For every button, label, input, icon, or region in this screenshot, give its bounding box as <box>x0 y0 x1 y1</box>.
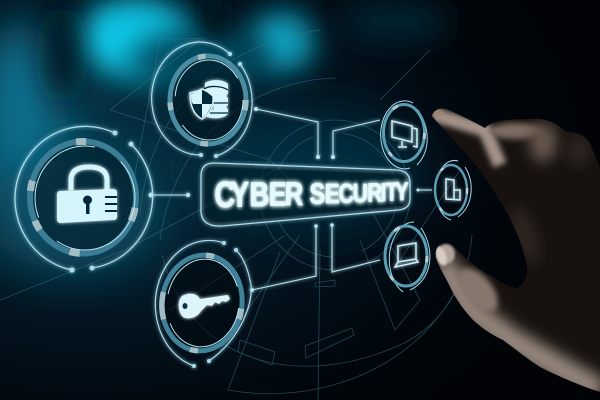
title: CYBER SECURITY: C <box>338 179 354 209</box>
rings <box>381 101 427 169</box>
inner band <box>170 56 246 144</box>
title: CYBER SECURITY: R <box>285 177 303 213</box>
icon: laptop <box>395 243 418 267</box>
panel: tablet circle <box>435 160 471 220</box>
title: CYBER SECURITY: I <box>381 179 386 207</box>
panel: monitor circle <box>381 101 427 169</box>
icon: padlock <box>57 167 117 223</box>
title: CYBER SECURITY: R <box>367 178 382 207</box>
icon: key <box>179 294 230 318</box>
outer ring <box>152 42 252 158</box>
rings <box>385 222 430 292</box>
connector lines <box>149 107 432 292</box>
pill outline <box>201 163 410 226</box>
title: CYBER SECURITY: E <box>269 177 286 213</box>
title: CYBER SECURITY: S <box>310 177 325 210</box>
title: CYBER SECURITY: Y <box>230 174 249 214</box>
background wireframe arcs <box>0 30 472 400</box>
panel: laptop circle <box>385 222 430 292</box>
title: CYBER SECURITY: Y <box>395 178 409 206</box>
panel: title pill <box>201 163 410 226</box>
title: CYBER SECURITY: B <box>250 175 269 214</box>
icon: shield and database <box>190 80 228 119</box>
outer ring <box>155 240 251 368</box>
panel: lock circle <box>15 126 153 273</box>
inner band <box>30 142 136 254</box>
rings <box>435 160 471 220</box>
title: CYBER SECURITY: T <box>386 178 398 206</box>
panel: shield and database circle <box>152 42 252 158</box>
icon: monitor <box>392 121 417 147</box>
panel: key circle <box>155 240 251 368</box>
icon: tablet and phone <box>446 179 460 200</box>
title: CYBER SECURITY: C <box>214 174 235 215</box>
outer ring <box>15 126 153 273</box>
title: CYBER SECURITY: E <box>325 179 340 210</box>
hand <box>432 108 600 392</box>
title: CYBER SECURITY: U <box>353 179 368 208</box>
inner band <box>156 250 248 356</box>
